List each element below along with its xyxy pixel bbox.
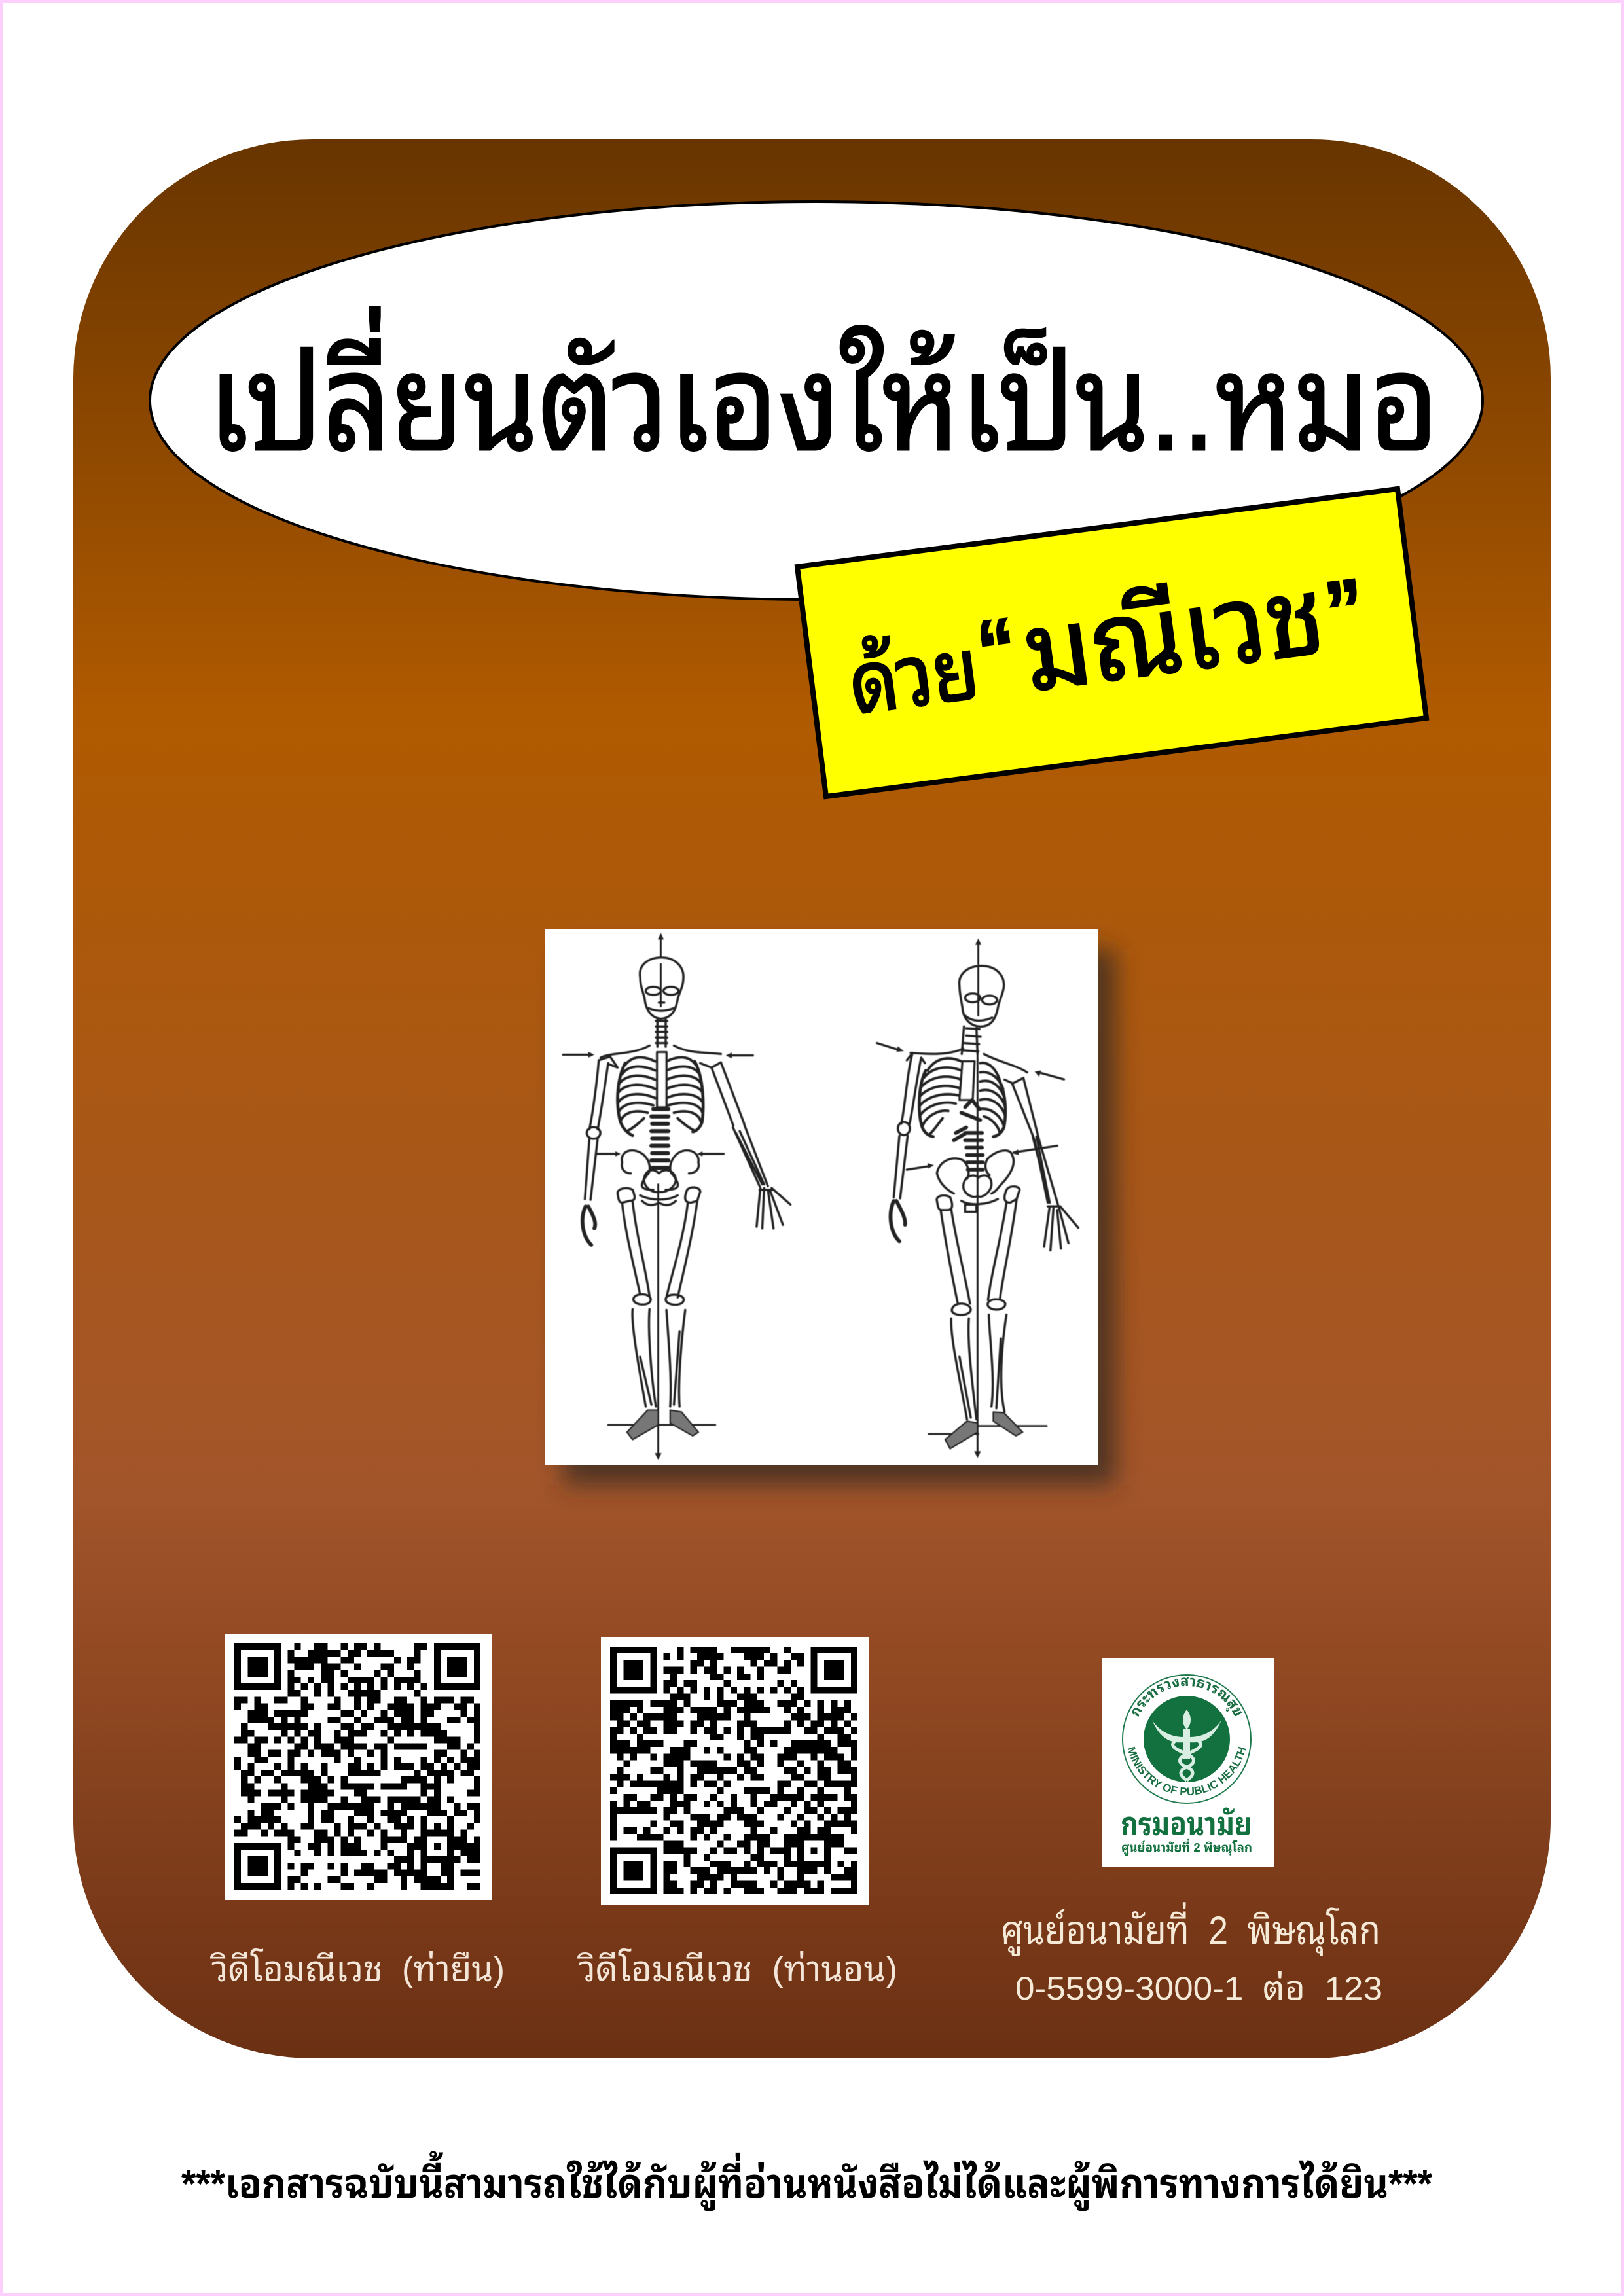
logo seal: กระทรวงสาธารณสุข	[1132, 1677, 1242, 1717]
skeleton: scoliosis posture	[877, 939, 1078, 1458]
alignment arrows	[877, 1043, 1064, 1170]
QR code: lying pose	[601, 1637, 869, 1905]
logo: Department of Health	[1102, 1658, 1274, 1867]
alignment arrows	[563, 1054, 753, 1154]
logo subname: ศูนย์อนามัยที่ 2 พิษณุโลก	[1121, 1838, 1252, 1856]
title bubble	[150, 202, 1483, 600]
panel: brown rounded background	[73, 139, 1551, 2058]
caption: lying: วิดีโอมณีเวช (ท่านอน)	[577, 1948, 897, 1989]
contact: phone: 0-5599-3000-1 ต่อ 123	[1015, 1970, 1382, 2007]
subtitle text: ”	[1320, 560, 1370, 660]
logo seal: MINISTRY OF PUBLIC HEALTH	[1127, 1746, 1246, 1795]
logo seal	[1122, 1674, 1252, 1804]
yellow subtitle card	[797, 489, 1426, 797]
subtitle text: มณีเวช	[1017, 555, 1331, 713]
contact: center name: ศูนย์อนามัยที่ 2 พิษณุโลก	[1001, 1902, 1380, 1956]
subtitle text: ด้วย	[844, 620, 984, 732]
caption: standing: วิดีโอมณีเวช (ท่ายืน)	[209, 1948, 505, 1989]
footer note: ***เอกสารฉบับนี้สามารถใช้ได้กับผู้ที่อ่านหนังสือไม่ได้และผู้พิการทางการได้ยิน***	[181, 2151, 1433, 2211]
subtitle text	[842, 550, 1372, 737]
QR code: standing pose	[225, 1634, 492, 1900]
skeleton: normal posture	[563, 933, 791, 1460]
subtitle text: “	[972, 600, 1022, 699]
title text: เปลี่ยนตัวเองให้เป็น..หมอ	[208, 307, 1439, 478]
logo name: กรมอนามัย	[1121, 1806, 1252, 1842]
skeleton image shadow	[563, 949, 1116, 1485]
skeleton posture illustration	[545, 929, 1098, 1465]
